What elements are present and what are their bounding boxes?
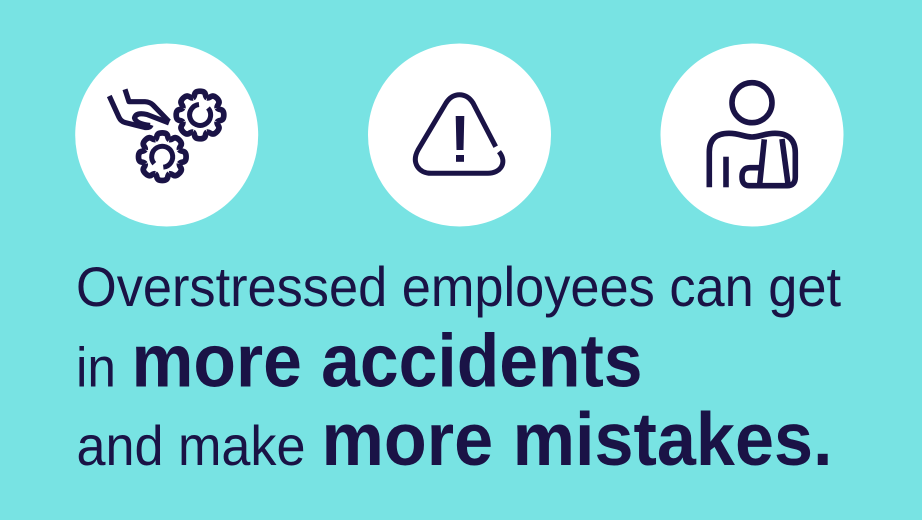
icon: hand and gears <box>75 44 258 226</box>
triangle outline <box>415 95 503 173</box>
headline <box>76 255 841 481</box>
person outline <box>709 83 795 187</box>
circle background <box>368 44 551 226</box>
line 2: in <box>76 336 116 399</box>
more accidents: more accidents <box>132 319 642 403</box>
exclamation mark <box>456 116 464 162</box>
icon: person with arm in sling <box>660 44 844 226</box>
upper gear <box>176 91 224 139</box>
circle background <box>660 44 844 226</box>
more mistakes: more mistakes. <box>322 397 832 481</box>
line 3: and make <box>76 414 306 477</box>
icon: warning triangle <box>368 44 551 226</box>
line 1: Overstressed employees can get <box>76 255 841 318</box>
hand <box>109 89 169 128</box>
lower gear <box>138 133 186 180</box>
circle background <box>75 44 258 226</box>
